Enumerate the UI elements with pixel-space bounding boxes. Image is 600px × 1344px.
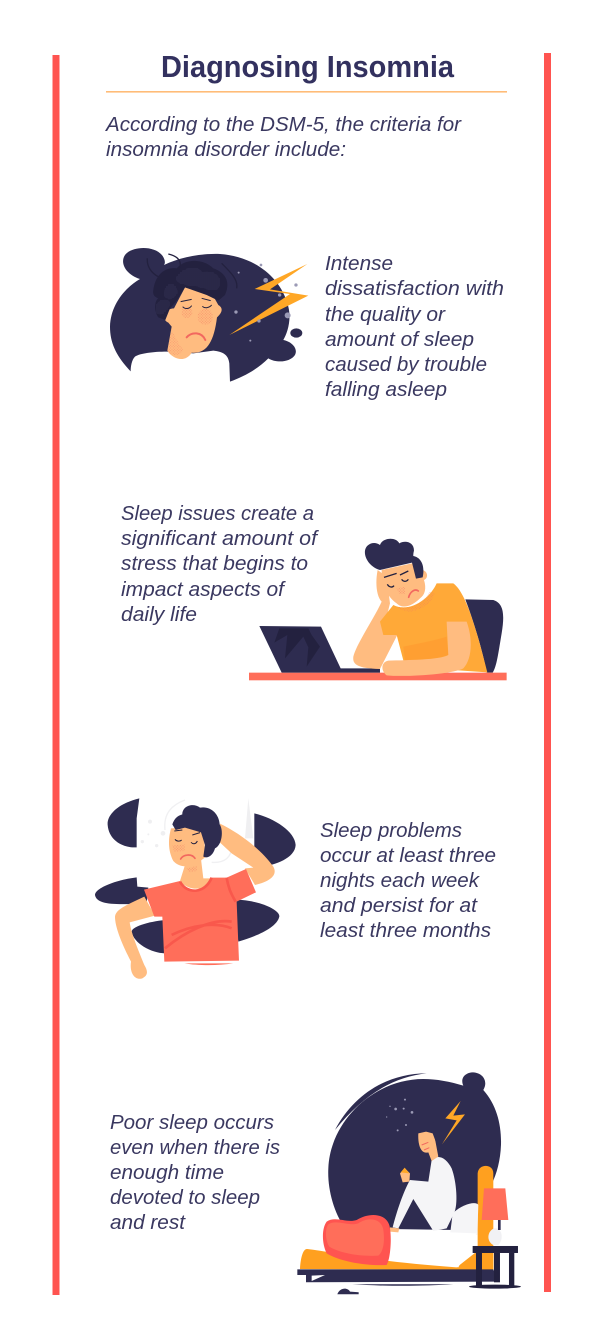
neck	[180, 859, 212, 889]
left red bar	[52, 55, 60, 1295]
head	[418, 1130, 438, 1161]
right red bar	[544, 53, 551, 1292]
text: criterion four: enough time	[110, 1162, 224, 1184]
hair	[153, 261, 227, 320]
text: criterion two	[121, 503, 320, 626]
text: criterion one: caused by trouble	[325, 354, 487, 376]
text: criterion three: least three months	[320, 920, 491, 942]
lightning	[442, 1101, 465, 1144]
head	[382, 562, 427, 606]
text: criterion four: and rest	[110, 1212, 186, 1234]
neck and face	[164, 287, 222, 359]
text: criterion one	[325, 253, 504, 401]
intro text	[105, 114, 462, 161]
title: Diagnosing Insomnia	[161, 49, 455, 84]
hair	[365, 539, 423, 579]
text: criterion four	[110, 1112, 280, 1234]
text: criterion three: nights each week	[320, 870, 480, 892]
lowered arm	[115, 897, 155, 979]
text: criterion two: Sleep issues create a	[121, 503, 314, 525]
laptop	[259, 626, 380, 673]
chair	[465, 599, 503, 673]
text: criterion four: even when there is	[110, 1137, 280, 1159]
text: criterion three: Sleep problems	[320, 820, 462, 842]
desk	[249, 673, 507, 680]
text: criterion two: stress that begins to	[121, 553, 308, 575]
sheet	[390, 1230, 477, 1267]
title underline	[106, 91, 507, 93]
night blob	[328, 1072, 501, 1230]
curly hair	[172, 805, 222, 857]
text: criterion two: impact aspects of	[121, 579, 287, 601]
intro text: insomnia disorder include:	[106, 139, 346, 161]
illustration: man scratching head	[95, 798, 296, 979]
swoosh	[335, 1073, 427, 1130]
floor shadow	[352, 1284, 453, 1286]
illustration: man at laptop	[249, 539, 507, 680]
face	[169, 827, 211, 866]
text: criterion one: Intense	[325, 253, 393, 275]
face details	[384, 571, 408, 587]
text: criterion four: Poor sleep occurs	[110, 1112, 274, 1134]
bed frame	[297, 1269, 498, 1282]
intro text: According to the DSM-5, the criteria for	[105, 114, 462, 136]
resting forearm	[382, 622, 471, 676]
text: criterion one: falling asleep	[325, 379, 447, 401]
text: criterion three: occur at least three	[320, 845, 496, 867]
closed eyes and mouth	[181, 298, 212, 309]
shirt	[144, 869, 256, 962]
text: criterion two: daily life	[121, 604, 197, 626]
hand with phone	[400, 1168, 410, 1182]
headboard	[478, 1166, 493, 1270]
lamp	[488, 1228, 502, 1245]
lightning	[229, 264, 308, 335]
stars	[386, 1099, 413, 1131]
slipper	[337, 1289, 359, 1294]
illustration: head with lightning	[110, 248, 308, 382]
shirt	[380, 583, 487, 672]
text: criterion three	[320, 820, 496, 942]
text: criterion three: and persist for at	[320, 895, 479, 917]
nightstand	[469, 1246, 521, 1289]
raised arm	[218, 824, 275, 885]
pillow	[323, 1215, 391, 1265]
bed	[300, 1249, 493, 1270]
foot	[390, 1227, 399, 1232]
raised arm	[353, 570, 397, 669]
face details	[174, 830, 200, 844]
man in white	[393, 1157, 456, 1231]
dark blobs	[95, 798, 296, 953]
text: criterion one: dissatisfaction with	[325, 278, 504, 300]
sparkles	[234, 264, 298, 342]
text: criterion two: significant amount of	[121, 528, 320, 550]
text: criterion four: devoted to sleep	[110, 1187, 260, 1209]
text: criterion one: the quality or	[325, 304, 446, 326]
illustration: man sitting on bed	[297, 1072, 521, 1294]
pillow marks	[165, 800, 232, 862]
text: criterion one: amount of sleep	[325, 329, 474, 351]
blanket lump	[450, 1203, 478, 1235]
